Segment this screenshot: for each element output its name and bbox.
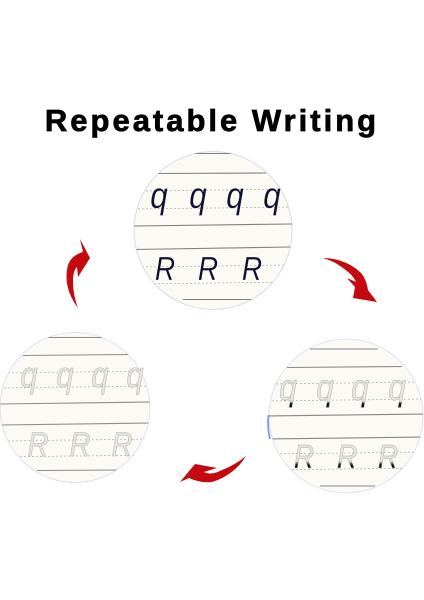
faint letters: q row: q	[91, 356, 109, 396]
infographic canvas	[0, 108, 424, 494]
arrow: left to top	[66, 239, 90, 308]
half-faded letters: R row: R	[337, 439, 357, 476]
half-faded letters: q row: q	[279, 368, 297, 409]
half-faded letters: R row: R	[294, 439, 314, 476]
panel: fading writing circle	[268, 339, 424, 493]
arrow: top to right	[323, 258, 377, 302]
faint letters: R row	[28, 425, 132, 464]
letters: q row: q	[189, 176, 207, 217]
half-faded letters: q row: q	[351, 368, 369, 409]
faint letters: q row	[20, 356, 144, 396]
panel: faded writing circle	[0, 332, 150, 482]
letters: q row: q	[226, 176, 244, 217]
letters: q row: q	[150, 176, 168, 217]
letters: R row: R	[198, 251, 218, 288]
half-faded letters: R row: R	[378, 439, 398, 476]
half-faded letters: q row: q	[316, 368, 334, 409]
half-faded letters: q row	[279, 368, 406, 409]
faint letters: R row: R	[28, 425, 48, 464]
half-faded letters: R row	[294, 439, 398, 476]
blue page edge	[268, 415, 270, 439]
faint letters: q row: q	[126, 356, 144, 396]
panel: finished writing circle	[134, 152, 292, 310]
letters: R row: R	[242, 251, 262, 288]
letters: q row	[150, 176, 281, 217]
half-faded letters: q row: q	[388, 368, 406, 409]
letters: q row: q	[263, 176, 281, 217]
faint letters: R row: R	[70, 425, 90, 464]
faint letters: q row: q	[56, 356, 74, 396]
arrow: right to bottom	[180, 456, 246, 482]
letters: R row: R	[155, 251, 175, 288]
letters: R row	[155, 251, 262, 288]
faint letters: R row: R	[112, 425, 132, 464]
title: Repeatable Writing	[45, 103, 379, 138]
faint letters: q row: q	[20, 356, 38, 396]
